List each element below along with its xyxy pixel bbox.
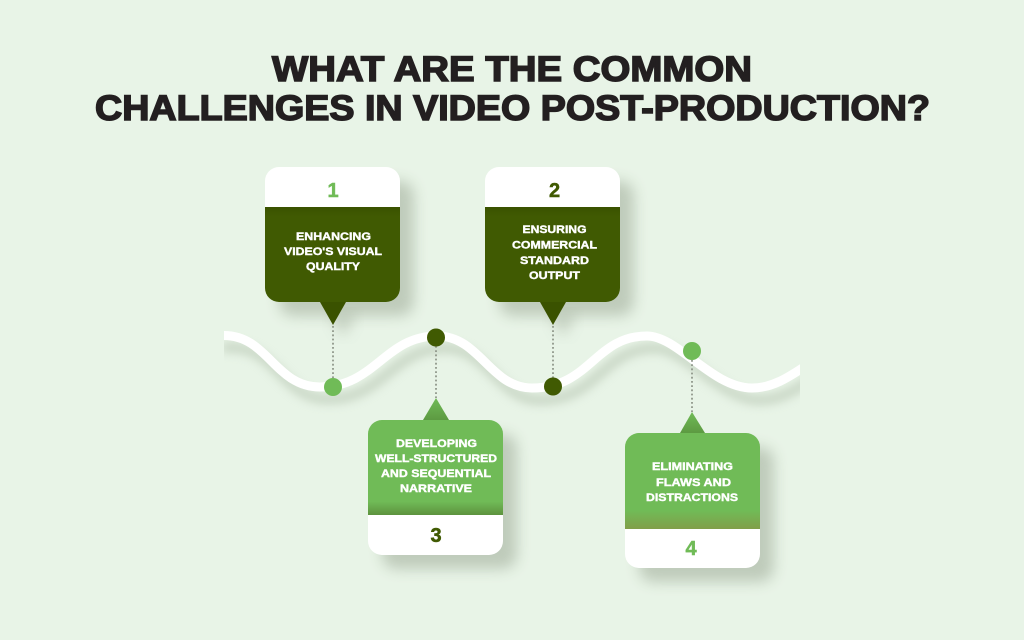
wave timeline <box>214 336 818 400</box>
card 3 text: AND SEQUENTIAL <box>381 468 491 480</box>
card 1 text: VIDEO'S VISUAL <box>284 246 382 258</box>
connector dotted lines <box>333 326 692 412</box>
marker dot 4 <box>683 342 701 360</box>
title: CHALLENGES IN VIDEO POST-PRODUCTION? <box>95 89 930 128</box>
card 4 text: ELIMINATING <box>652 461 733 473</box>
number 2: 2 <box>549 180 560 202</box>
title <box>95 50 930 128</box>
number 4: 4 <box>685 538 697 560</box>
card 4 <box>625 412 774 582</box>
card 3 text <box>375 438 497 495</box>
marker dot 2 <box>544 378 562 396</box>
card 1 <box>265 167 414 337</box>
card 3 text: DEVELOPING <box>396 438 477 450</box>
title: WHAT ARE THE COMMON <box>272 50 752 89</box>
card 2 <box>485 167 634 337</box>
card 3 text: NARRATIVE <box>400 483 472 495</box>
card 2 text: ENSURING <box>522 224 586 236</box>
card 2 text: COMMERCIAL <box>512 240 597 252</box>
card 2 text: OUTPUT <box>529 270 580 282</box>
pointer 4 <box>680 412 705 433</box>
marker dot 1 <box>324 378 342 396</box>
card 1 text: QUALITY <box>306 261 361 273</box>
card 3 <box>368 398 517 569</box>
card 2 text <box>512 224 597 282</box>
pointer 1 <box>320 302 346 325</box>
card 4 text <box>646 461 738 504</box>
card 1 text <box>284 231 382 273</box>
card 3 text: WELL-STRUCTURED <box>375 453 497 465</box>
pointer 3 <box>423 398 449 420</box>
card 4 text: FLAWS AND <box>656 477 731 489</box>
number 3: 3 <box>430 525 442 547</box>
card 2 text: STANDARD <box>520 255 589 267</box>
card 1 text: ENHANCING <box>296 231 371 243</box>
card 4 text: DISTRACTIONS <box>646 492 738 504</box>
pointer 2 <box>540 302 566 325</box>
marker dot 3 <box>427 328 445 346</box>
number 1: 1 <box>327 180 339 202</box>
